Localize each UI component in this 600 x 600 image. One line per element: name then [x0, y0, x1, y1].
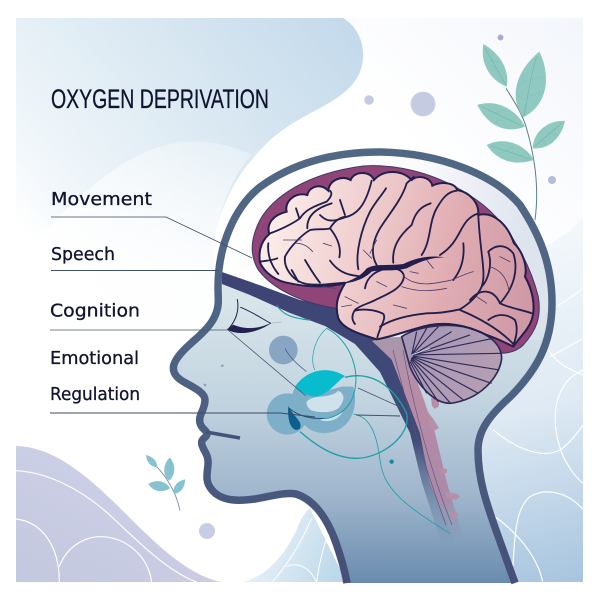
light wave overlay — [64, 142, 252, 320]
cyan structure — [295, 370, 345, 397]
nerve roots — [428, 398, 460, 517]
mouth line — [206, 432, 240, 438]
label: Emotional Regulation: Emotional — [50, 349, 139, 369]
icon: small leaf sprig — [146, 455, 185, 511]
blue limbic shapes — [267, 383, 355, 435]
label: Emotional Regulation: Regulation — [50, 385, 140, 405]
label: Emotional Regulation — [50, 349, 400, 417]
top-left blue blob — [16, 18, 364, 245]
label: Cognition — [50, 302, 400, 407]
label: Movement: Movement — [51, 190, 152, 210]
dark dura band — [222, 272, 456, 545]
brain — [252, 166, 539, 403]
spinal cord — [372, 337, 463, 537]
teal dot — [389, 459, 394, 464]
cerebrum — [259, 172, 534, 347]
teardrop — [288, 406, 301, 430]
label: Speech: Speech — [51, 245, 115, 265]
lavender wave bottom left — [16, 446, 222, 582]
cerebellum — [402, 325, 502, 403]
icon: large leaf sprig — [477, 44, 565, 220]
title: OXYGEN DEPRIVATION — [51, 84, 269, 114]
cranium interior — [218, 152, 552, 340]
decorative dots — [199, 34, 556, 539]
light blue shape under chin — [240, 508, 347, 583]
head fill — [173, 152, 552, 583]
face features — [204, 299, 450, 533]
head outline — [173, 152, 552, 583]
head silhouette — [173, 152, 552, 583]
nerve lines — [277, 305, 450, 533]
label: Movement — [51, 190, 252, 258]
label: Cognition: Cognition — [50, 302, 140, 322]
blue circle — [269, 336, 298, 364]
Sylvian fissure — [340, 256, 445, 284]
eye — [227, 299, 282, 333]
white contour lines right — [493, 288, 583, 582]
fine sulci branches — [283, 240, 510, 308]
meninges — [252, 166, 539, 353]
right-side blue area — [482, 222, 583, 582]
sulci — [261, 177, 532, 345]
freckle dots — [221, 364, 224, 367]
